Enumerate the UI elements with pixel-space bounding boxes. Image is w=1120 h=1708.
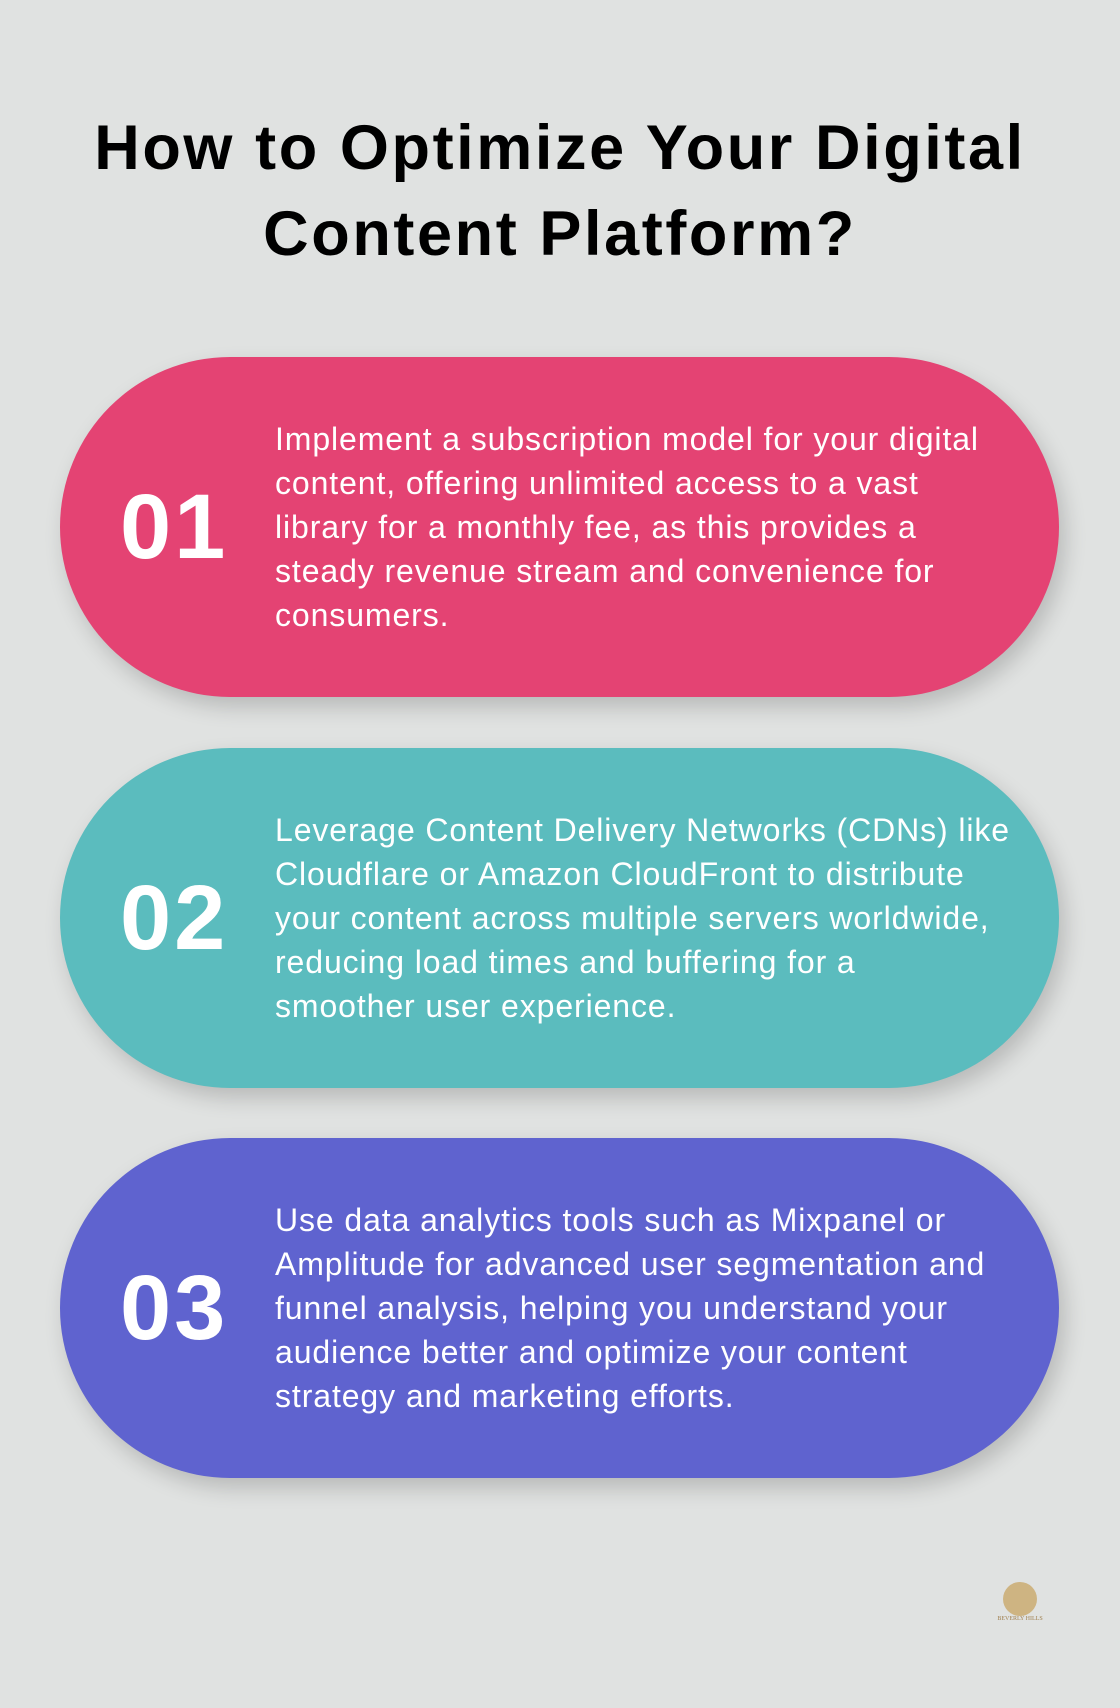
text 03: audience better and optimize your content — [275, 1334, 908, 1370]
text 03 — [275, 1202, 985, 1414]
text 02: Leverage Content Delivery Networks (CDNs) like — [275, 812, 1010, 848]
title: Content Platform? — [263, 199, 857, 269]
title — [94, 113, 1026, 269]
panel: step 02 — [60, 748, 1059, 1088]
text 01: content, offering unlimited access to a vast — [275, 465, 919, 501]
text 01: steady revenue stream and convenience for — [275, 553, 934, 589]
text 01 — [275, 421, 979, 633]
text 03: Amplitude for advanced user segmentation and — [275, 1246, 985, 1282]
text 02: smoother user experience. — [275, 988, 676, 1024]
text 01: library for a monthly fee, as this provides a — [275, 509, 917, 545]
title: How to Optimize Your Digital — [94, 113, 1026, 183]
text 02: reducing load times and buffering for a — [275, 944, 856, 980]
text 02 — [275, 812, 1010, 1024]
number 02: 02 — [120, 867, 228, 969]
panel: step 03 — [60, 1138, 1059, 1478]
logo: BEVERLY HILLS — [997, 1616, 1043, 1622]
text 01: consumers. — [275, 597, 449, 633]
text 03: Use data analytics tools such as Mixpanel or — [275, 1202, 946, 1238]
text 02: Cloudflare or Amazon CloudFront to distribute — [275, 856, 965, 892]
number 03: 03 — [120, 1257, 228, 1359]
text 01: Implement a subscription model for your digital — [275, 421, 979, 457]
text 03: strategy and marketing efforts. — [275, 1378, 735, 1414]
text 03: funnel analysis, helping you understand your — [275, 1290, 948, 1326]
logo — [997, 1582, 1043, 1622]
panel: step 01 — [60, 357, 1059, 697]
text 02: your content across multiple servers worldwide, — [275, 900, 990, 936]
number 01: 01 — [120, 476, 228, 578]
